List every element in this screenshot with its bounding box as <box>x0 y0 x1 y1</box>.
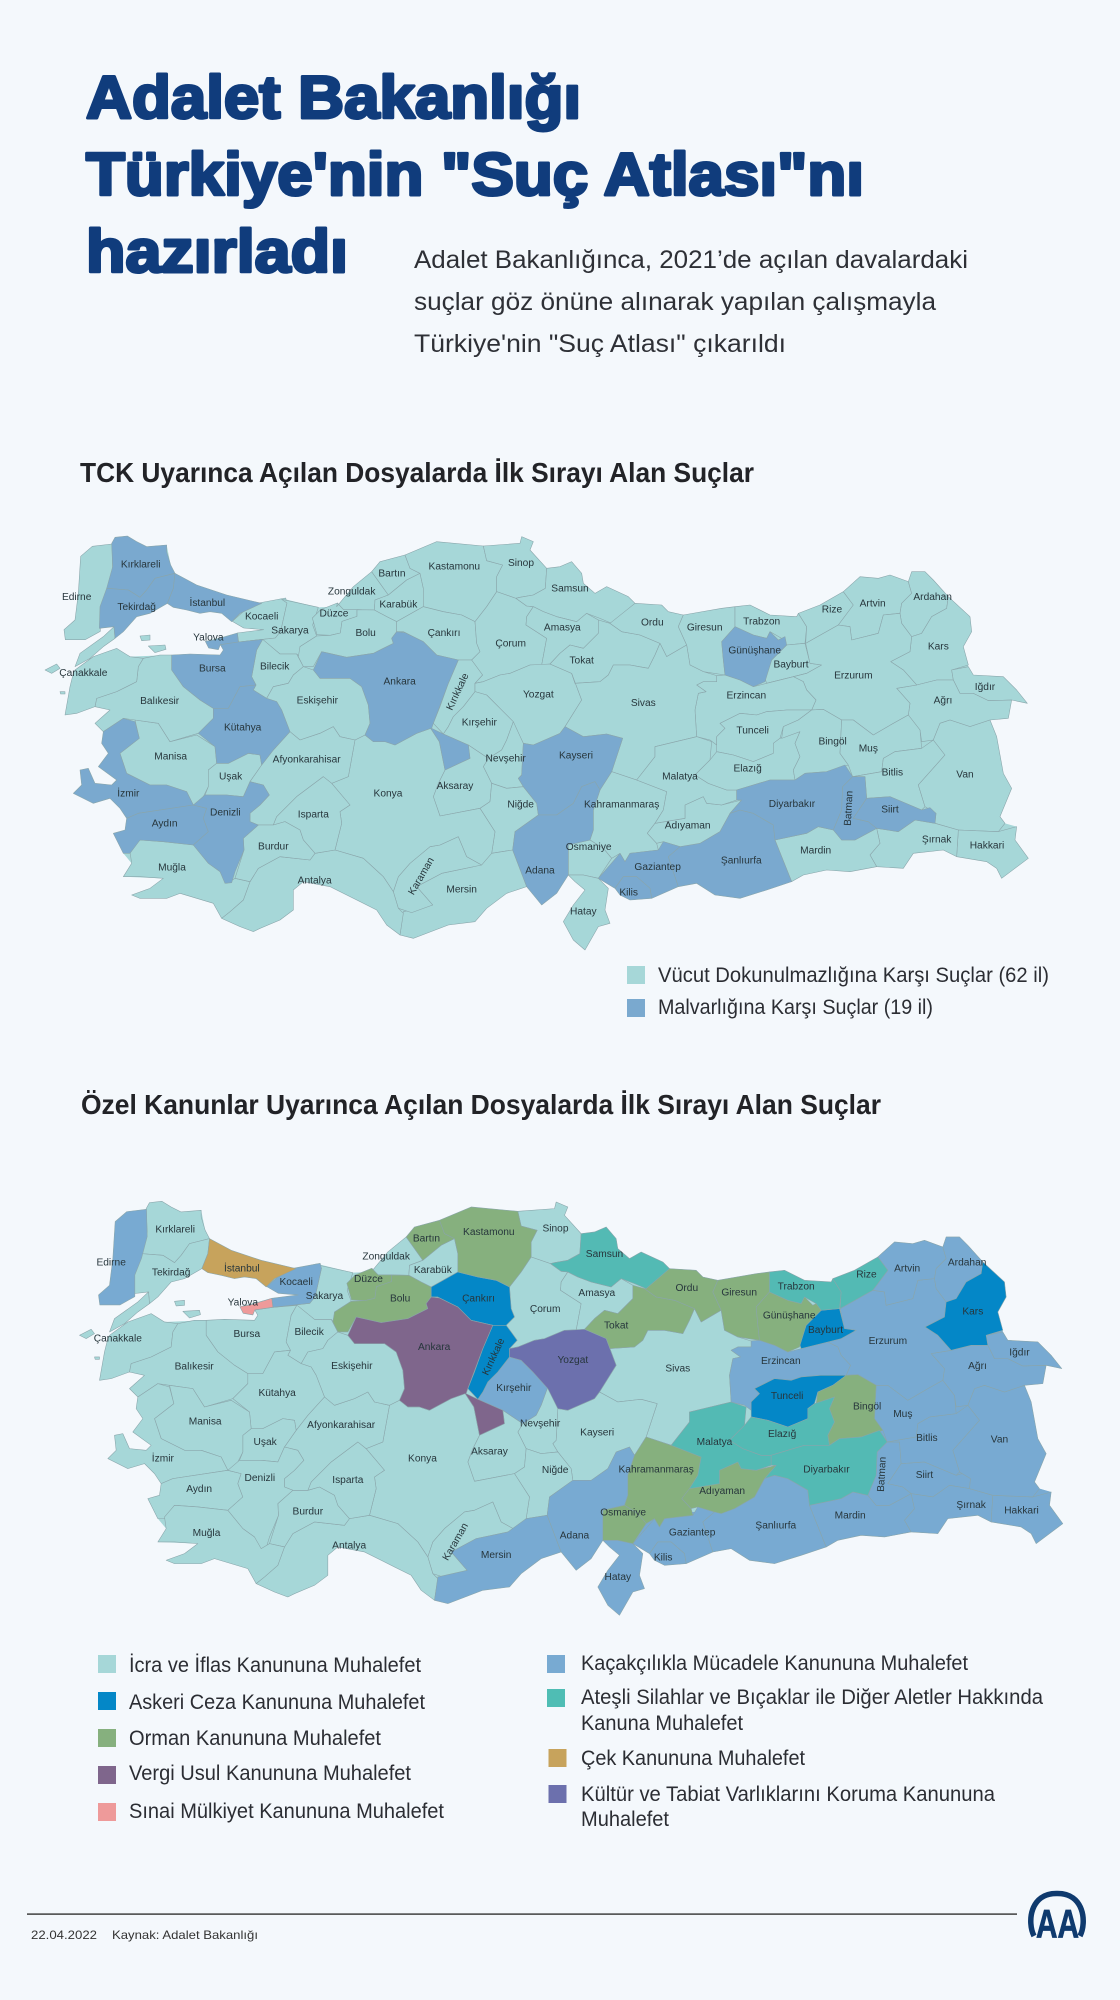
province labels: Uşak <box>254 1437 278 1448</box>
legend: special laws map <box>98 1652 1043 1831</box>
province labels: Tokat <box>604 1321 629 1332</box>
province labels: Yalova <box>193 632 224 643</box>
province labels: Samsun <box>586 1249 623 1260</box>
province labels: Ankara <box>384 677 416 688</box>
province labels: Çankırı <box>462 1293 495 1304</box>
title <box>86 64 864 285</box>
legend item: Kaçakçılık: Kaçakçılıkla Mücadele Kanununa Muhalefet <box>581 1652 968 1675</box>
province labels: Erzincan <box>761 1356 801 1367</box>
province labels: Aydın <box>186 1484 212 1495</box>
footer: date and source: 22.04.2022 <box>31 1929 97 1942</box>
province labels: Bingöl <box>818 736 847 747</box>
province labels: Çorum <box>495 639 526 650</box>
province labels: Şanlıurfa <box>755 1521 797 1532</box>
province labels: Batman <box>876 1457 889 1492</box>
legend item: İcra ve İflas: İcra ve İflas Kanununa Muhalefet <box>129 1654 421 1677</box>
province labels: Muğla <box>158 863 186 874</box>
province labels: Denizli <box>210 808 241 819</box>
province labels: Nevşehir <box>520 1419 561 1430</box>
province labels: Muş <box>859 744 878 755</box>
province labels: Niğde <box>507 800 534 811</box>
province labels: Adana <box>525 865 555 876</box>
province labels: Sivas <box>631 698 656 709</box>
title: Türkiye'nin "Suç Atlası"nı <box>86 141 864 208</box>
province labels: Rize <box>822 604 843 615</box>
province labels: Bitlis <box>916 1433 938 1444</box>
province labels: Nevşehir <box>486 753 526 764</box>
province labels: Şırnak <box>956 1500 987 1511</box>
legend item: Ateşli Silahlar: Kanuna Muhalefet <box>581 1712 743 1735</box>
province labels: Yozgat <box>557 1355 588 1366</box>
legend item: Çek: Çek Kanununa Muhalefet <box>581 1747 805 1770</box>
province labels: Edirne <box>62 592 92 603</box>
map: special law crimes by province <box>79 1201 1064 1616</box>
province labels: Bilecik <box>294 1327 325 1338</box>
province labels: Afyonkarahisar <box>273 755 341 766</box>
province labels: Amasya <box>544 623 581 634</box>
province labels: Balıkesir <box>175 1361 214 1372</box>
province labels: Karaman <box>407 856 437 897</box>
province labels: Çorum <box>530 1304 560 1315</box>
province labels: Siirt <box>916 1470 933 1481</box>
province labels: Kırklareli <box>121 559 160 570</box>
province labels: Ağrı <box>934 696 952 707</box>
province labels: Ağrı <box>968 1361 987 1372</box>
province labels: Gaziantep <box>669 1527 716 1538</box>
province labels: Kahramanmaraş <box>584 799 659 810</box>
province labels: Karaman <box>441 1521 471 1563</box>
province labels: Kayseri <box>580 1428 614 1439</box>
province labels: Şırnak <box>922 835 952 846</box>
province labels: Artvin <box>894 1264 920 1275</box>
province labels: Sinop <box>542 1223 569 1234</box>
legend item: Orman: Orman Kanununa Muhalefet <box>129 1727 381 1750</box>
province labels: Tunceli <box>771 1391 803 1402</box>
province labels: Konya <box>374 788 403 799</box>
heading: TCK map: TCK Uyarınca Açılan Dosyalarda İlk Sırayı Alan Suçlar <box>80 457 754 488</box>
title: hazırladı <box>86 218 348 285</box>
province labels: Kayseri <box>559 751 593 762</box>
legend item: Kültür ve Tabiat <box>548 1783 995 1831</box>
heading: special laws map: Özel Kanunlar Uyarınca Açılan Dosyalarda İlk Sırayı Alan Suçlar <box>81 1089 881 1120</box>
province labels: Bayburt <box>808 1325 843 1336</box>
subtitle text block: Adalet Bakanlığınca, 2021’de açılan davalardaki <box>414 246 968 274</box>
province labels: Giresun <box>721 1288 757 1299</box>
province labels: Eskişehir <box>331 1361 373 1372</box>
province: Yalova, Sınai Mülkiyet <box>240 1298 273 1315</box>
province labels: Kırşehir <box>496 1383 532 1394</box>
province labels: Kastamonu <box>429 562 480 573</box>
province labels: Sakarya <box>271 626 309 637</box>
province labels <box>94 1223 1039 1583</box>
province labels: İzmir <box>152 1452 174 1465</box>
province labels: Artvin <box>860 598 886 609</box>
province labels: Kilis <box>654 1553 673 1564</box>
province labels: Samsun <box>551 584 589 595</box>
province labels: Sinop <box>508 558 534 569</box>
province labels: Siirt <box>881 805 899 816</box>
province labels: Bursa <box>199 664 226 675</box>
province labels: Amasya <box>578 1288 616 1299</box>
province labels: Bayburt <box>773 660 809 671</box>
province labels: Kırklareli <box>155 1225 195 1236</box>
province labels: Günüşhane <box>763 1311 816 1322</box>
province labels: Edirne <box>96 1257 126 1268</box>
province labels: Mersin <box>481 1550 511 1561</box>
province labels: Bursa <box>234 1329 260 1340</box>
subtitle text block <box>414 246 968 358</box>
province labels: Adana <box>560 1531 590 1542</box>
province labels: Şanlıurfa <box>721 855 762 866</box>
province labels: Muğla <box>193 1528 221 1539</box>
province labels: Ordu <box>675 1283 698 1294</box>
province labels: Bartın <box>378 568 406 579</box>
province labels: Erzincan <box>727 691 766 702</box>
provinces: Kaçakçılık <box>98 1209 1063 1615</box>
province labels: Erzurum <box>834 671 873 682</box>
legend item: Kültür ve Tabiat: Muhalefet <box>581 1808 669 1831</box>
province labels: Kocaeli <box>279 1277 313 1288</box>
province labels: Tekirdağ <box>117 602 156 613</box>
province labels: Erzurum <box>869 1336 907 1347</box>
province labels: Antalya <box>332 1541 366 1552</box>
province labels: Sakarya <box>306 1291 344 1302</box>
province labels: İzmir <box>117 786 140 799</box>
province labels: Günüşhane <box>728 645 781 656</box>
province labels: Ardahan <box>913 592 952 603</box>
province labels: Burdur <box>258 841 289 852</box>
province labels: Karabük <box>379 600 418 611</box>
province labels: Osmaniye <box>566 842 612 853</box>
legend item: bodily integrity: Vücut Dokunulmazlığına Karşı Suçlar (62 il) <box>658 964 1049 987</box>
province labels: Bingöl <box>853 1402 881 1413</box>
province labels: Karabük <box>414 1265 453 1276</box>
province labels: Kütahya <box>258 1388 296 1399</box>
province labels: Ordu <box>641 618 664 629</box>
province labels: Zonguldak <box>362 1252 411 1263</box>
province: İstanbul, Çek <box>202 1239 296 1287</box>
province labels: Tokat <box>569 655 594 666</box>
province labels: Trabzon <box>743 616 780 627</box>
province labels: Mardin <box>835 1511 866 1522</box>
province labels: Antalya <box>298 875 332 886</box>
province labels: Bolu <box>390 1293 410 1304</box>
province labels: Iğdır <box>975 682 996 693</box>
province labels: Bartın <box>413 1234 440 1245</box>
provinces: Askeri Ceza <box>431 1262 1006 1427</box>
provinces: İcra ve İflas <box>79 1201 751 1600</box>
province labels: Aksaray <box>437 781 474 792</box>
province labels: Van <box>991 1435 1008 1446</box>
province labels: Zonguldak <box>328 586 376 597</box>
province labels: Kırşehir <box>462 718 497 729</box>
province labels: Hakkari <box>1004 1506 1039 1517</box>
province labels: Kocaeli <box>245 612 278 623</box>
legend item: Ateşli Silahlar <box>547 1686 1043 1735</box>
province labels: Düzce <box>354 1274 383 1285</box>
province labels: Giresun <box>687 622 722 633</box>
province labels: Denizli <box>245 1473 275 1484</box>
province labels: Malatya <box>662 772 698 783</box>
footer: date and source <box>31 1929 258 1942</box>
province labels: Aksaray <box>471 1446 509 1457</box>
province labels: Kahramanmaraş <box>619 1465 694 1476</box>
province labels: Isparta <box>332 1475 364 1486</box>
legend item: Ateşli Silahlar: Ateşli Silahlar ve Bıçaklar ile Diğer Aletler Hakkında <box>581 1686 1043 1709</box>
legend: TCK map <box>627 964 1049 1019</box>
province labels: Osmaniye <box>600 1507 646 1518</box>
legend item: Sınai Mülkiyet: Sınai Mülkiyet Kanununa Muhalefet <box>129 1800 444 1823</box>
province labels: Malatya <box>697 1437 733 1448</box>
province labels: Sivas <box>665 1363 690 1374</box>
province labels: Diyarbakır <box>769 799 816 810</box>
province labels: Çankırı <box>428 628 460 639</box>
province labels: Hatay <box>570 907 598 918</box>
province labels: Düzce <box>320 609 349 620</box>
province labels: Tekirdağ <box>152 1267 191 1278</box>
province labels: Balıkesir <box>140 696 180 707</box>
footer: date and source: Kaynak: Adalet Bakanlığı <box>112 1929 258 1942</box>
province labels: Uşak <box>219 772 243 783</box>
subtitle text block: Türkiye'nin "Suç Atlası" çıkarıldı <box>414 330 786 358</box>
province labels: Çanakkale <box>94 1333 142 1344</box>
province labels: Gaziantep <box>634 862 681 873</box>
title: Adalet Bakanlığı <box>86 64 581 131</box>
province labels: Manisa <box>189 1417 222 1428</box>
province labels: Eskişehir <box>297 696 339 707</box>
province labels: Trabzon <box>778 1282 815 1293</box>
province labels: Niğde <box>542 1465 569 1476</box>
legend item: property: Malvarlığına Karşı Suçlar (19 il) <box>658 996 933 1019</box>
province labels: Ardahan <box>948 1257 986 1268</box>
province labels <box>59 558 1004 918</box>
province labels: Burdur <box>293 1507 324 1518</box>
province labels: Hatay <box>605 1572 632 1583</box>
icon: AA logo: AA <box>1036 1902 1079 1946</box>
province: Ankara, Vergi Usul <box>348 1297 504 1435</box>
provinces: Ateşli Silahlar <box>550 1227 888 1505</box>
province labels: Çanakkale <box>59 668 108 679</box>
province labels: Elazığ <box>768 1429 797 1440</box>
provinces: Orman <box>333 1207 883 1544</box>
legend item: Vergi Usul: Vergi Usul Kanununa Muhalefet <box>129 1762 411 1785</box>
province labels: Kütahya <box>224 723 262 734</box>
province labels: Kars <box>962 1307 983 1318</box>
province labels: Tunceli <box>736 726 769 737</box>
province labels: Bilecik <box>260 662 290 673</box>
province: Yozgat, Kültür ve Tabiat <box>509 1329 616 1410</box>
province labels: Van <box>956 769 974 780</box>
province labels: Adıyaman <box>699 1486 745 1497</box>
province labels: Hakkari <box>970 840 1004 851</box>
province labels: Adıyaman <box>665 821 711 832</box>
province labels: Batman <box>843 791 856 826</box>
map: TCK crimes by province <box>45 536 1028 950</box>
province labels: Aydın <box>152 819 178 830</box>
legend item: Askeri Ceza: Askeri Ceza Kanununa Muhalefet <box>129 1691 425 1714</box>
province labels: Isparta <box>298 810 329 821</box>
province labels: Mersin <box>446 885 477 896</box>
province labels: Kilis <box>619 887 638 898</box>
map silhouette underlay <box>64 536 1028 938</box>
province labels: Kırıkkale <box>445 671 472 712</box>
province labels: Rize <box>856 1270 877 1281</box>
province labels: Kastamonu <box>463 1227 515 1238</box>
provinces: bodily integrity crimes <box>45 537 1028 950</box>
province labels: Manisa <box>154 751 187 762</box>
province labels: Konya <box>408 1454 437 1465</box>
province labels: Yalova <box>228 1298 258 1309</box>
icon: AA logo <box>1031 1893 1083 1946</box>
subtitle text block: suçlar göz önüne alınarak yapılan çalışmayla <box>414 288 936 316</box>
map silhouette underlay <box>158 1212 1051 1596</box>
province labels: Bolu <box>355 628 376 639</box>
province labels: Mardin <box>800 845 831 856</box>
province labels: Ankara <box>418 1342 451 1353</box>
province labels: Elazığ <box>733 764 762 775</box>
province labels: İstanbul <box>189 596 225 609</box>
province labels: Iğdır <box>1009 1347 1030 1358</box>
province labels: Diyarbakır <box>803 1464 850 1475</box>
province labels: Muş <box>893 1409 912 1420</box>
provinces: property crimes <box>73 536 936 905</box>
province labels: Afyonkarahisar <box>307 1420 376 1431</box>
province labels: Kars <box>928 641 949 652</box>
province labels: Yozgat <box>523 690 554 701</box>
province labels: Bitlis <box>882 768 903 779</box>
province labels: Kırıkkale <box>481 1336 507 1377</box>
legend item: Kültür ve Tabiat: Kültür ve Tabiat Varlıklarını Koruma Kanununa <box>581 1783 995 1806</box>
province labels: İstanbul <box>224 1261 260 1274</box>
